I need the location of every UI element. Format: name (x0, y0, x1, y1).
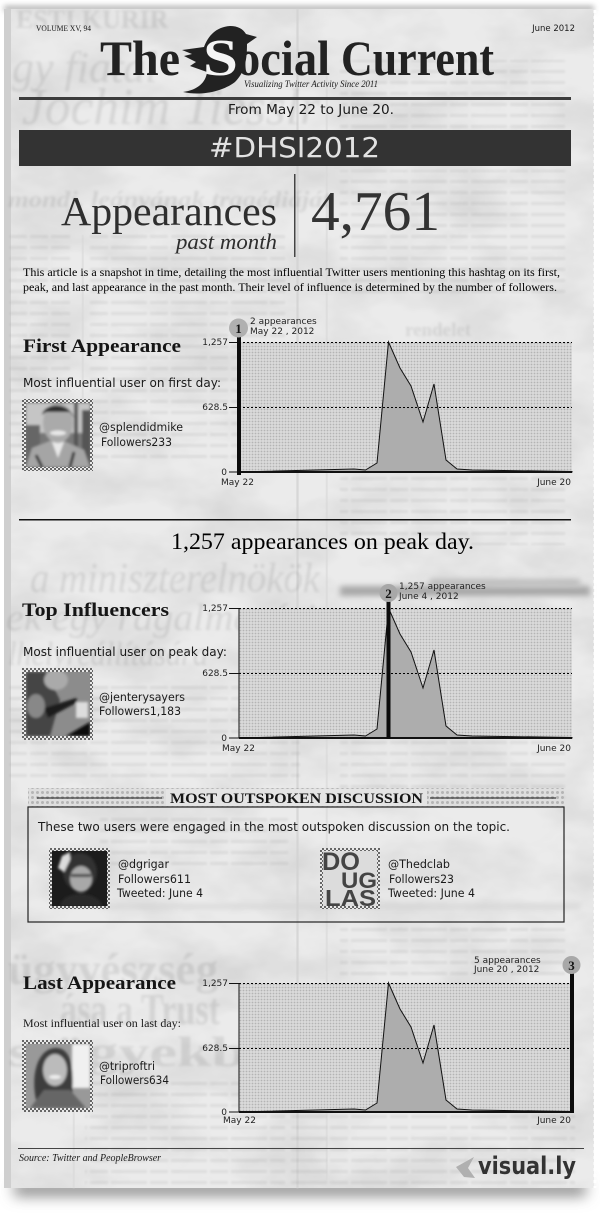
ghost newsprint headlines: a miniszterelnökök (30, 556, 321, 602)
ghost newsprint headlines: gy fiatal (12, 43, 157, 92)
user details: Thedclab: Tweeted: June 4 (387, 886, 475, 900)
marker 2 (380, 582, 486, 739)
user handle: @splendidmike (99, 420, 183, 434)
area chart: last: May 22 (223, 1116, 256, 1126)
stat label: Appearances (61, 188, 277, 234)
peak day headline: 1,257 appearances on peak day. (171, 529, 474, 554)
marker 3: June 20 , 2012 (473, 965, 539, 975)
ghost newsprint headlines: ek egy rágalmazási (6, 597, 316, 639)
ghost newsprint headlines: mondj. leányának tragédiáját (8, 187, 331, 212)
heading: Top Influencers (22, 600, 169, 621)
marker 3 (473, 956, 580, 1113)
user handle: @jenterysayers (99, 690, 185, 704)
follower count: Followers1,183 (99, 704, 181, 718)
discussion intro: These two users were engaged in the most outspoken discussion on the topic. (37, 820, 510, 834)
area chart: first: June 20 (536, 478, 571, 488)
hashtag banner: #DHSI2012 (209, 131, 380, 164)
ghost newsprint headlines: s-ügyekben (8, 1030, 308, 1076)
ghost newsprint headlines (6, 5, 472, 1076)
newspaper title: Current (341, 30, 494, 86)
source credit: Source: Twitter and PeopleBrowser (19, 1153, 161, 1164)
area chart: peak: June 20 (536, 744, 571, 754)
user caption: Most influential user on peak day: (23, 645, 227, 659)
heading: Last Appearance (23, 973, 176, 994)
ghost newsprint headlines: ESTI KURIR (16, 5, 169, 34)
intro paragraph: peak, and last appearance in the past month. Their level of influence is determined by the number of followers. (23, 280, 557, 294)
marker 1: May 22 , 2012 (250, 327, 314, 337)
tagline: Visualizing Twitter Activity Since 2011 (244, 79, 378, 89)
user caption: Most influential user on first day: (23, 376, 221, 390)
logo: visual.ly: visual.ly (478, 1152, 576, 1180)
marker 2: June 4 , 2012 (398, 592, 459, 602)
date label: June 2012 (531, 24, 575, 34)
user details: Thedclab (387, 857, 475, 900)
panel: most outspoken discussion (28, 788, 564, 922)
user details: dgrigar: @dgrigar (118, 857, 169, 871)
area chart: peak (202, 604, 572, 754)
ghost newsprint headlines: ügyvészség (8, 945, 218, 994)
area chart: first: 628.5 (202, 403, 228, 413)
panel: first appearance (22, 317, 572, 488)
ghost newsprint headlines: ása a Trust (60, 985, 220, 1034)
user details: Thedclab: @Thedclab (388, 857, 450, 871)
newspaper title: ocial (237, 30, 330, 86)
ghost newsprint headlines: Jochim Tiesslr (22, 79, 321, 136)
avatar: splendidmike (22, 399, 93, 471)
stat value: 4,761 (311, 181, 440, 243)
hashtag banner (19, 130, 571, 166)
area chart: last: 1,257 (202, 979, 228, 989)
avatar: Thedclab: DO (322, 848, 360, 876)
avatar: dgrigar (49, 848, 110, 909)
area chart: last: 628.5 (202, 1044, 228, 1054)
marker 2: 2 (385, 586, 392, 601)
user details: dgrigar (116, 857, 203, 900)
avatar: Thedclab: UG (341, 868, 377, 893)
marker 2: 1,257 appearances (399, 582, 486, 592)
user details: Thedclab: Followers23 (389, 872, 454, 886)
area chart: last (202, 979, 572, 1126)
area chart: peak: 628.5 (202, 669, 228, 679)
area chart: peak: 0 (221, 734, 227, 744)
torn right paper edge (594, 10, 596, 1188)
avatar: jenterysayers (22, 668, 93, 740)
icon: bird logo (182, 26, 257, 94)
panel: top influencers (22, 582, 572, 754)
area chart: first: May 22 (221, 478, 254, 488)
area chart: peak: May 22 (222, 744, 255, 754)
newspaper title: S (203, 30, 238, 87)
marker 1: 2 appearances (250, 317, 317, 327)
date range: From May 22 to June 20. (228, 103, 394, 118)
avatar: Thedclab (320, 848, 380, 911)
heading: First Appearance (23, 336, 181, 357)
stat sublabel: past month (174, 229, 277, 254)
intro paragraph (23, 265, 560, 294)
area chart: first: 0 (221, 468, 227, 478)
area chart: last: 0 (221, 1108, 227, 1118)
area chart: peak: 1,257 (202, 604, 228, 614)
newspaper title (100, 30, 494, 87)
marker 1 (229, 317, 317, 475)
area chart: first (202, 338, 572, 488)
follower count: Followers634 (100, 1073, 169, 1087)
marker 3: 5 appearances (474, 956, 541, 966)
avatar: triproftri (22, 1040, 93, 1112)
section header band: MOST OUTSPOKEN DISCUSSION (170, 791, 423, 807)
ghost newsprint headlines: lhelyreállítására (8, 636, 208, 673)
avatar: Thedclab: LAS (325, 885, 376, 911)
user details: dgrigar: Tweeted: June 4 (116, 886, 203, 900)
masthead (36, 24, 575, 94)
user caption: Most influential user on last day: (23, 1016, 181, 1030)
area chart: last: June 20 (536, 1116, 571, 1126)
marker 3: 3 (568, 958, 575, 973)
volume label: VOLUME XV, 94 (36, 24, 91, 33)
total appearances stat (61, 174, 440, 257)
newspaper title: The (100, 30, 180, 86)
marker 1: 1 (235, 321, 242, 336)
panel: last appearance (22, 956, 580, 1126)
discussion box (28, 807, 564, 922)
user details: dgrigar: Followers611 (118, 872, 191, 886)
section header band (28, 788, 564, 807)
area chart: first: 1,257 (202, 338, 228, 348)
user handle: @triproftri (99, 1059, 155, 1073)
intro paragraph: This article is a snapshot in time, detailing the most influential Twitter users mentioning this hashtag on its first, (23, 265, 560, 279)
ghost newsprint headlines: rendelet (405, 320, 472, 341)
follower count: Followers233 (101, 435, 172, 449)
